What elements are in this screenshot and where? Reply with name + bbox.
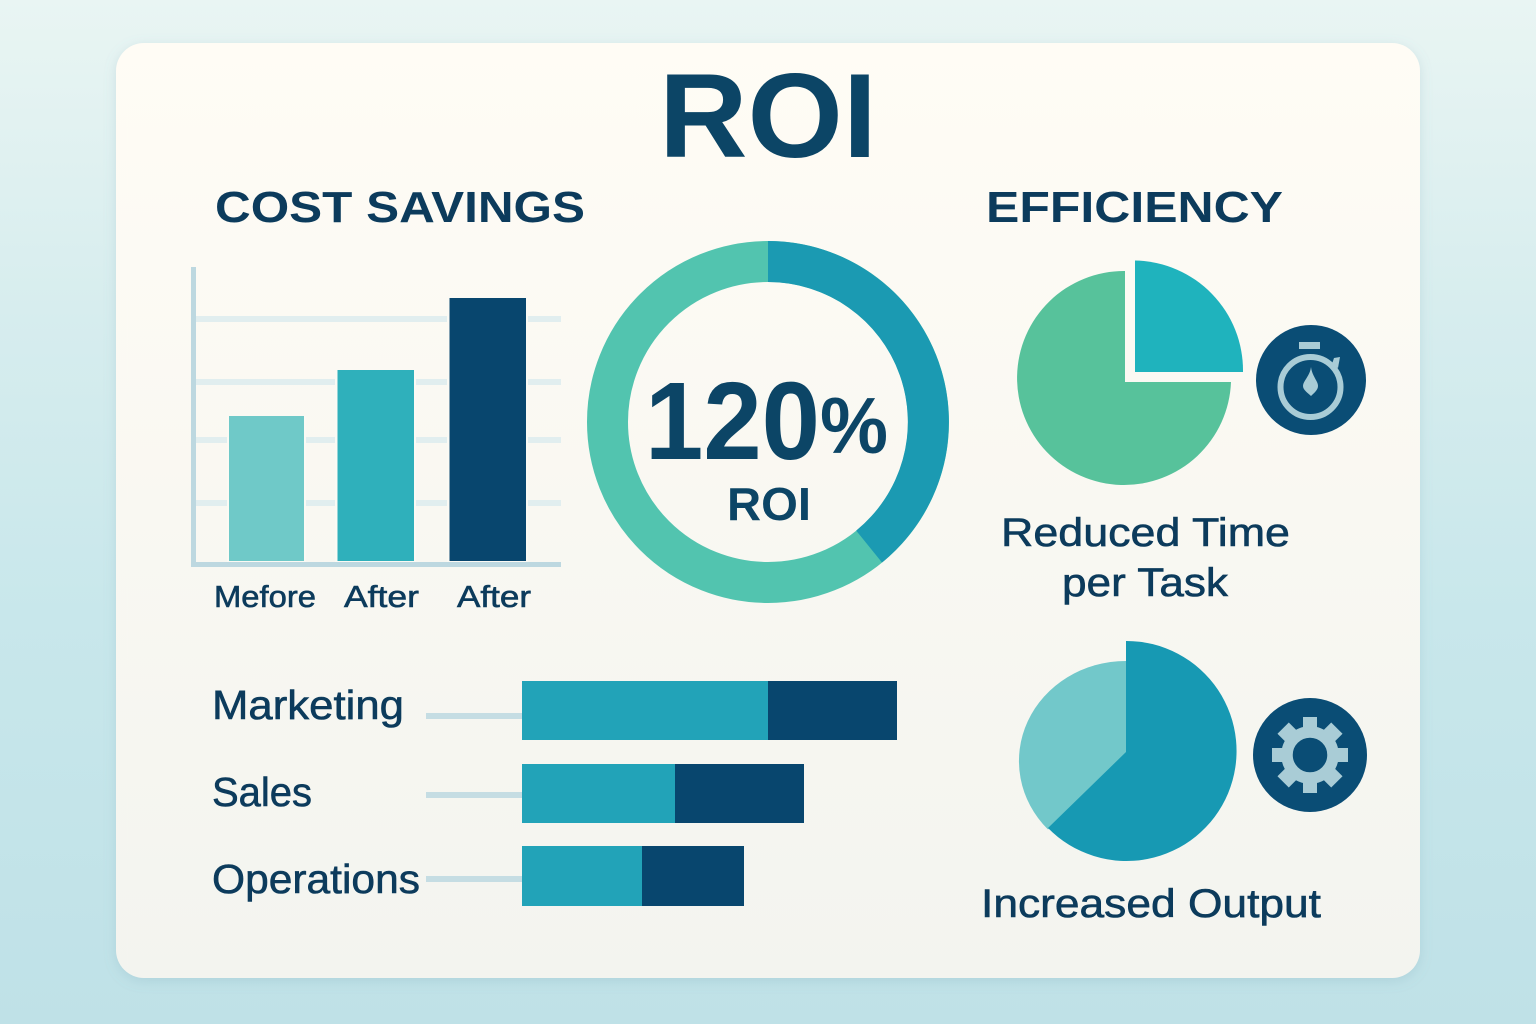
icon: stopwatch bbox=[1256, 325, 1366, 435]
heading: cost savings: COST SAVINGS bbox=[215, 183, 585, 232]
donut chart: 120% ROI: ROI bbox=[727, 478, 811, 530]
bar chart: before and after costs: Mefore bbox=[214, 579, 316, 614]
pie chart: reduced time bbox=[1017, 260, 1243, 485]
label: reduced time per task bbox=[1001, 511, 1290, 605]
horizontal bars: department costs: Marketing bbox=[212, 682, 404, 728]
pie chart: increased output bbox=[1019, 641, 1237, 861]
panel: main card bbox=[116, 43, 1420, 978]
bar chart: before and after costs: After bbox=[457, 579, 531, 614]
donut chart: 120% ROI bbox=[608, 241, 949, 582]
bar chart: before and after costs bbox=[191, 267, 561, 614]
donut chart: 120% ROI: 120 bbox=[645, 360, 820, 483]
label: increased output: Increased Output bbox=[981, 882, 1321, 926]
horizontal bars: department costs: Operations bbox=[212, 856, 420, 902]
donut chart: 120% ROI: % bbox=[820, 381, 888, 470]
bar chart: before and after costs: After bbox=[344, 579, 419, 614]
label: reduced time per task: Reduced Time bbox=[1001, 511, 1290, 555]
horizontal bars: department costs bbox=[212, 681, 897, 906]
icon: gear bbox=[1253, 698, 1367, 812]
title: ROI bbox=[659, 49, 877, 183]
label: reduced time per task: per Task bbox=[1062, 561, 1229, 605]
heading: efficiency: EFFICIENCY bbox=[986, 183, 1283, 232]
horizontal bars: department costs: Sales bbox=[212, 769, 312, 815]
